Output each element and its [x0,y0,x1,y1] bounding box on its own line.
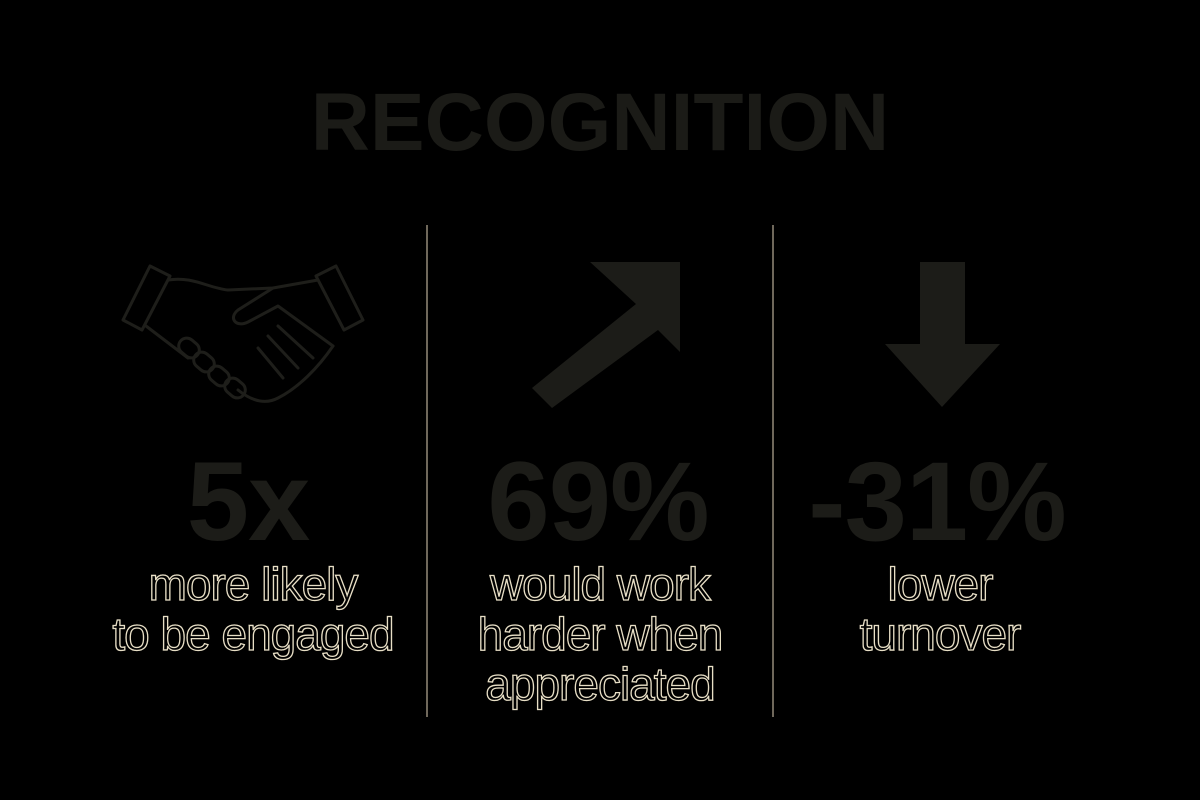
label [112,558,394,660]
title: RECOGNITION [311,77,889,168]
label: would work [490,558,710,610]
label: appreciated [485,658,715,710]
number: 5x [187,439,309,564]
number: -31% [808,439,1066,564]
icon: handshake [122,264,364,403]
number: 69% [487,439,709,564]
icon: arrow down [885,262,1000,407]
label: harder when [478,608,722,660]
label [860,558,1022,660]
icon: arrow up-right [532,262,680,408]
panel: work harder [478,262,722,710]
label: to be engaged [112,608,394,660]
label: lower [888,558,992,610]
label: turnover [860,608,1020,660]
label [478,558,722,710]
panel: turnover [808,262,1066,660]
panel: engaged [112,264,394,660]
label: more likely [149,558,357,610]
